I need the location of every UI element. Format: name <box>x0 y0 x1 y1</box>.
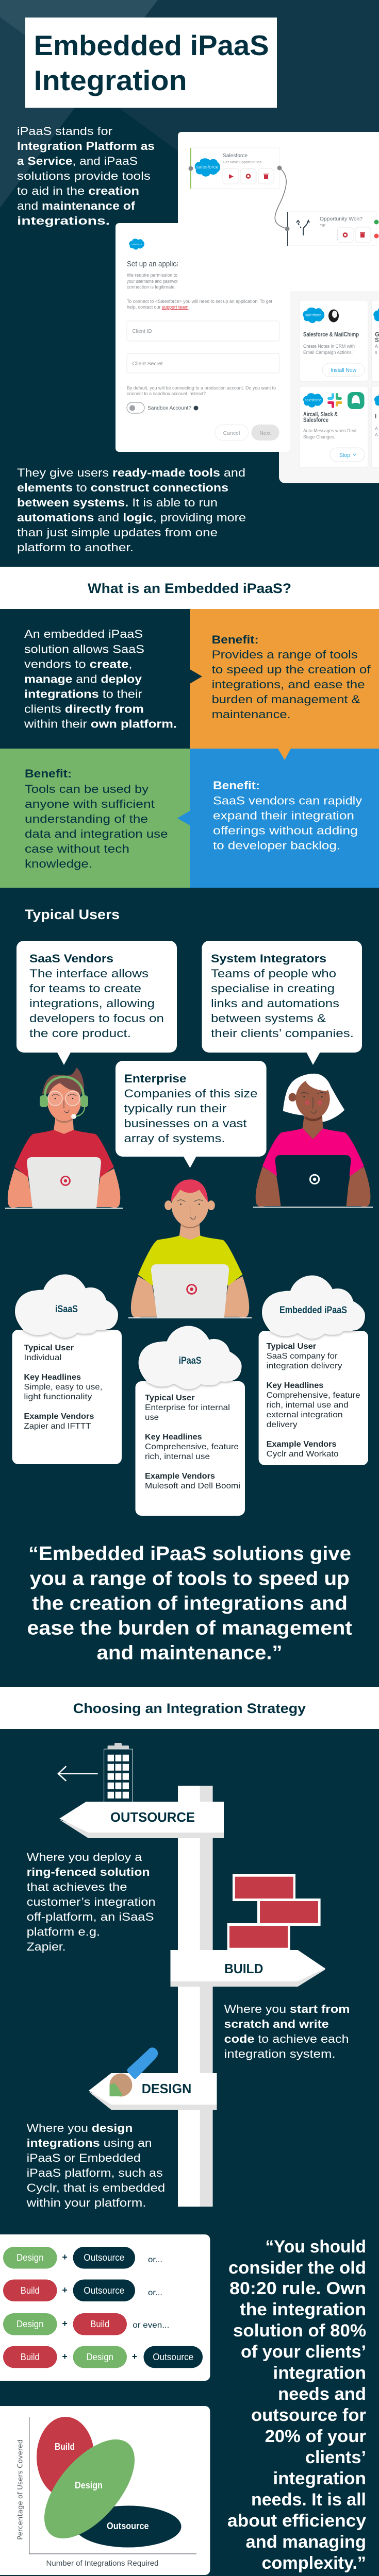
grid panel: definition: vendors to create , <box>24 657 132 671</box>
pull quote: 80:20 rule <box>227 2237 366 2573</box>
speech bubble: System Integrators: links and automations <box>211 997 339 1010</box>
workflow node: Opportunity Won: T/F <box>320 223 326 228</box>
pull quote: 80:20 rule: outsource for <box>251 2405 366 2425</box>
build description: integration system. <box>224 2047 336 2060</box>
template cards cropped at page edge <box>371 300 379 467</box>
speech bubble: Enterprise: typically run their <box>124 1102 227 1115</box>
intro text block <box>17 125 155 227</box>
combination row: design plus outsource: or... <box>148 2256 162 2264</box>
illustration: person with yellow shirt at laptop <box>128 1179 252 1318</box>
template card: Aircall, Slack and Salesforce: Stage Changes. <box>303 434 335 439</box>
comparison card: Embedded iPaaS: Cyclr and Workato <box>267 1450 339 1459</box>
combination row: design plus build: Build <box>90 2319 109 2329</box>
speech bubble: Enterprise <box>116 1061 267 1168</box>
heading: Choosing an Integration Strategy: Choosing an Integration Strategy <box>73 1701 306 1716</box>
speech bubble: System Integrators: between systems & <box>211 1012 326 1025</box>
pull quote: 80:20 rule: clients’ <box>305 2448 366 2467</box>
design description: iPaaS platform, such as <box>27 2166 163 2179</box>
template card: Salesforce and MailChimp: Email Campaign Actions. <box>303 350 353 355</box>
cloud: iSaaS: iSaaS <box>55 1304 78 1315</box>
speech bubble: SaaS Vendors: the core product. <box>29 1027 131 1040</box>
form buttons <box>215 425 279 440</box>
chart axes <box>29 2417 196 2554</box>
combination row: build plus design plus outsource <box>3 2346 203 2368</box>
grid panel: blue benefit <box>190 749 379 888</box>
grid panel: definition: integrations to their <box>24 687 142 701</box>
build description: scratch and write <box>224 2018 329 2030</box>
pull quote: 80:20 rule: 80:20 rule. Own <box>229 2279 366 2298</box>
template cards cropped at page edge: S <box>375 337 379 344</box>
arrow: definition to orange <box>190 669 202 684</box>
speech bubble: System Integrators: System Integrators <box>211 952 326 965</box>
combination row: design plus build: + <box>62 2318 68 2329</box>
speech bubble: SaaS Vendors: The interface allows <box>29 967 149 980</box>
grid panel: blue benefit: offerings without adding <box>213 824 358 837</box>
chart: strategy by coverage and integrations <box>0 2406 210 2575</box>
speech bubble: SaaS Vendors: integrations, allowing <box>29 997 155 1010</box>
grid panel: blue benefit: SaaS vendors can rapidly <box>213 794 362 807</box>
outsource description: Where you deploy a <box>27 1851 142 1863</box>
pull quote: 80:20 rule: about efficiency <box>227 2511 366 2531</box>
outsource description: Zapier. <box>27 1940 66 1953</box>
grid panel: blue benefit: to developer backlog. <box>213 839 340 852</box>
combination row: design plus outsource <box>3 2247 162 2269</box>
form buttons: Next <box>259 430 271 436</box>
outsource description <box>27 1851 156 1953</box>
comparison card: Embedded iPaaS: Typical User <box>267 1342 316 1351</box>
template cards cropped at page edge: A <box>375 426 378 431</box>
hero background facets <box>0 0 379 208</box>
design description: iPaaS or Embedded <box>27 2151 141 2164</box>
workflow node: Salesforce <box>189 148 282 189</box>
design description: integrations using an <box>27 2137 152 2149</box>
design description: within your platform. <box>26 2196 146 2209</box>
outsource description: that achieves the <box>27 1880 127 1893</box>
panel: set up an application form screenshot: connection is legitimate. <box>127 284 176 290</box>
combination row: build plus design plus outsource: Design <box>87 2352 113 2362</box>
speech bubble: System Integrators: Teams of people who <box>211 967 336 980</box>
title <box>25 18 277 108</box>
speech bubble: Enterprise: Companies of this size <box>124 1087 258 1100</box>
panel: set up an application form screenshot: Set up an application <box>127 260 191 268</box>
comparison card: Embedded iPaaS: Example Vendors <box>267 1440 337 1449</box>
ellipse: Outsource <box>75 2506 182 2547</box>
ellipse: Build: Build <box>55 2442 75 2452</box>
sign: OUTSOURCE <box>59 1802 224 1838</box>
comparison card: iPaaS: Comprehensive, feature <box>145 1443 239 1451</box>
workflow node: Salesforce: Get New Opportunities <box>223 160 261 164</box>
template cards cropped at page edge: A <box>375 344 378 349</box>
grid panel: orange benefit: maintenance. <box>212 708 291 721</box>
panel: set up an application form screenshot: salesforce <box>131 243 142 246</box>
second intro text block: than just simple updates from one <box>17 526 218 539</box>
cloud: Embedded iPaaS <box>262 1276 365 1338</box>
combination row: design plus outsource: Outsource <box>84 2252 124 2263</box>
comparison card: Embedded iPaaS <box>259 1276 368 1465</box>
pull quote: tools: the creation of integrations and <box>32 1593 348 1615</box>
panel: hero introduction <box>0 0 379 554</box>
grid panel: orange benefit <box>190 609 379 749</box>
panel: strategy combinations <box>0 2234 210 2381</box>
illustration: person with headset at laptop <box>5 1067 123 1208</box>
grid panel: definition: clients directly from <box>24 703 144 715</box>
cloud: iPaaS: iPaaS <box>178 1355 201 1366</box>
speech bubble: System Integrators: specialise in creating <box>211 982 335 995</box>
panel: set up an application form screenshot: your username and password <box>127 279 180 284</box>
pull quote: tools <box>27 1543 352 1664</box>
sandbox toggle: Sandbox Account? <box>147 405 191 411</box>
build description: code to achieve each <box>224 2032 349 2045</box>
speech bubble: System Integrators <box>202 941 362 1065</box>
panel: benefits grid <box>0 609 379 888</box>
icon: paintbrush <box>109 2047 158 2097</box>
speech bubble: SaaS Vendors: for teams to create <box>29 982 141 995</box>
comparison card: iPaaS <box>135 1326 245 1516</box>
arrow: orange to blue <box>278 749 291 760</box>
comparison card: Embedded iPaaS: Key Headlines <box>267 1381 323 1390</box>
sandbox toggle <box>127 402 198 413</box>
speech bubble: System Integrators: their clients’ companies. <box>211 1027 354 1040</box>
comparison card: iSaaS: Zapier and IFTTT <box>24 1422 91 1431</box>
panel: workflow builder screenshot <box>178 132 379 291</box>
outsource description: platform e.g. <box>27 1925 100 1938</box>
heading: Choosing an Integration Strategy <box>0 1687 379 1729</box>
pull quote: 80:20 rule: “You should <box>265 2237 366 2257</box>
pull quote: tools: “Embedded iPaaS solutions give <box>28 1543 351 1565</box>
sign: DESIGN <box>89 2047 217 2110</box>
second intro text block: automations and logic , providing more <box>17 511 246 524</box>
comparison card: iPaaS: Enterprise for internal <box>145 1403 230 1412</box>
pull quote: 80:20 rule: and managing <box>245 2532 366 2552</box>
comparison card: Embedded iPaaS: SaaS company for <box>267 1352 338 1361</box>
sign: BUILD: BUILD <box>224 1961 263 1976</box>
panel: integration templates screenshot <box>279 258 379 483</box>
grid panel: blue benefit: Benefit: <box>213 779 260 792</box>
combination row: build plus design plus outsource: + <box>62 2351 68 2362</box>
panel: set up an application form screenshot: By default, you will be connecting to a production account. Do you want to <box>127 385 276 391</box>
pull quote: tools: you a range of tools to speed up <box>30 1568 350 1590</box>
comparison card: iPaaS: Key Headlines <box>145 1433 202 1442</box>
speech bubble: SaaS Vendors <box>17 941 177 1065</box>
grid panel: definition: solution allows SaaS <box>24 643 144 655</box>
title: Embedded iPaaS <box>34 29 269 61</box>
comparison card: iSaaS: Simple, easy to use, <box>24 1383 102 1392</box>
speech bubble: Enterprise: Enterprise <box>124 1072 187 1085</box>
form field: client id <box>127 321 279 341</box>
grid panel: definition <box>0 609 190 749</box>
template card: Salesforce and MailChimp: Salesforce & MailChimp <box>303 332 359 338</box>
comparison card: Embedded iPaaS: Comprehensive, feature <box>267 1391 360 1400</box>
build description: Where you start from <box>224 2003 350 2015</box>
grid panel: orange benefit: Benefit: <box>212 633 259 646</box>
form buttons: Cancel <box>223 430 240 436</box>
form field: client id: Client ID <box>132 329 152 334</box>
design description: Cyclr, that is embedded <box>27 2181 165 2194</box>
pull quote: tools: ease the burden of management <box>27 1618 352 1639</box>
template card: Salesforce and MailChimp: Install Now <box>331 367 356 374</box>
combination row: design plus outsource: Design <box>17 2252 43 2263</box>
grid panel: green benefit: Tools can be used by <box>25 783 149 795</box>
signpost pole <box>178 1786 213 2207</box>
intro text block: a Service , and iPaaS <box>17 155 138 167</box>
grid panel: green benefit: knowledge. <box>25 857 92 870</box>
sign: BUILD <box>170 1950 325 1987</box>
x axis label: Number of Integrations Required <box>46 2559 159 2568</box>
intro text block: iPaaS stands for <box>17 125 112 138</box>
ellipse: Outsource: Outsource <box>107 2521 149 2531</box>
comparison card: iSaaS: Key Headlines <box>24 1373 81 1382</box>
comparison card: Embedded iPaaS: delivery <box>267 1420 298 1429</box>
grid panel: definition: manage and deploy <box>24 673 142 685</box>
grid panel: definition: An embedded iPaaS <box>24 628 143 640</box>
pull quote: 80:20 rule: integration <box>273 2469 366 2488</box>
template card: Salesforce and MailChimp <box>300 300 368 381</box>
outsource description: off-platform, an iSaaS <box>27 1910 154 1923</box>
intro text block: to aid in the creation <box>17 184 139 197</box>
grid panel: orange benefit: integrations, and ease the <box>212 678 365 691</box>
workflow node: Salesforce: salesforce <box>196 164 219 170</box>
intro text block: integrations. <box>17 214 110 227</box>
form field: client secret: Client Secret <box>132 361 163 367</box>
grid panel: green benefit <box>0 749 190 888</box>
combination row: build plus outsource: or... <box>148 2289 162 2297</box>
comparison card: iPaaS: use <box>145 1413 159 1422</box>
intro text block: Integration Platform as <box>17 140 155 152</box>
template card: Aircall, Slack and Salesforce: Salesforce <box>303 417 328 423</box>
grid panel: blue benefit: expand their integration <box>213 809 354 822</box>
panel: set up an application form screenshot: To connect to <Salesforce> you will need to set up an application. To get <box>127 299 272 304</box>
comparison card: iSaaS: Individual <box>24 1353 61 1362</box>
comparison card: iPaaS: Example Vendors <box>145 1472 215 1481</box>
second intro text block <box>17 466 246 554</box>
comparison card: iSaaS: light functionality <box>24 1393 92 1401</box>
pull quote: 80:20 rule: solution of 80% <box>233 2321 366 2341</box>
comparison card: Embedded iPaaS: rich, internal use and <box>267 1401 349 1410</box>
outsource description: ring-fenced solution <box>27 1866 150 1878</box>
template cards cropped at page edge: A <box>375 432 378 437</box>
grid panel: green benefit: case without tech <box>25 842 129 855</box>
comparison card: iPaaS: Mulesoft and Dell Boomi <box>145 1482 240 1490</box>
outsource description: customer’s integration <box>27 1895 156 1908</box>
grid panel: green benefit: Benefit: <box>25 767 72 780</box>
y axis label: Percentage of Users Covered <box>17 2439 25 2540</box>
template card: Aircall, Slack and Salesforce <box>300 386 368 467</box>
pull quote: 80:20 rule: 20% of your <box>265 2427 366 2446</box>
grid panel: definition: within their own platform. <box>24 717 177 731</box>
pull quote: 80:20 rule: integration <box>273 2363 366 2383</box>
combination row: build plus outsource <box>3 2279 162 2301</box>
sign: OUTSOURCE: OUTSOURCE <box>110 1809 195 1825</box>
second intro text block: They give users ready-made tools and <box>17 466 245 479</box>
combination row: build plus design plus outsource: Build <box>21 2352 40 2362</box>
pull quote: 80:20 rule: of your clients’ <box>241 2342 366 2362</box>
title: Integration <box>34 64 187 96</box>
build description <box>224 2003 350 2060</box>
comparison card: iSaaS: Typical User <box>24 1344 74 1352</box>
template card: Aircall, Slack and Salesforce: Auto Messages when Deal <box>303 428 356 433</box>
comparison card: iPaaS: rich, internal use <box>145 1452 210 1461</box>
speech bubble: SaaS Vendors: SaaS Vendors <box>29 952 113 965</box>
pull quote: 80:20 rule: complexity.” <box>262 2553 366 2573</box>
grid panel: green benefit: data and integration use <box>25 827 168 840</box>
heading: What is an Embedded iPaaS <box>0 567 379 609</box>
pull quote: 80:20 rule: the integration <box>240 2300 366 2319</box>
icon: office building with arrow <box>58 1743 133 1803</box>
grid panel: green benefit: anyone with sufficient <box>25 798 155 810</box>
second intro text block: between systems. It is able to run <box>17 496 218 509</box>
second intro text block: elements to construct connections <box>17 481 228 494</box>
pull quote: 80:20 rule: consider the old <box>228 2258 366 2278</box>
form field: client secret <box>127 353 279 373</box>
comparison card: iSaaS <box>12 1275 122 1464</box>
ellipse: Design: Design <box>75 2480 103 2490</box>
combination row: design plus build: Design <box>17 2319 43 2329</box>
combination row: design plus outsource: + <box>62 2252 68 2262</box>
combination row: build plus design plus outsource: Outsource <box>153 2352 193 2362</box>
pull quote: 80:20 rule: needs and <box>278 2384 366 2404</box>
workflow connector <box>275 168 287 229</box>
workflow node: Opportunity Won: Opportunity Won? <box>320 216 362 222</box>
panel: set up an application form screenshot <box>116 223 290 452</box>
design description: Where you design <box>27 2122 133 2134</box>
workflow node: Salesforce: Salesforce <box>223 152 248 159</box>
combination row: build plus design plus outsource: + <box>132 2351 137 2362</box>
grid panel: orange benefit: burden of management & <box>212 693 360 706</box>
template card: Aircall, Slack and Salesforce: Stop <box>339 452 350 459</box>
design description <box>26 2122 165 2209</box>
panel: set up an application form screenshot: We require permission to <box>127 273 177 278</box>
grid panel: orange benefit: to speed up the creation of <box>212 663 371 676</box>
sign: DESIGN: DESIGN <box>142 2081 191 2096</box>
cloud: iSaaS <box>15 1275 118 1337</box>
comparison card: iPaaS: Typical User <box>145 1394 195 1402</box>
cloud: Embedded iPaaS: Embedded iPaaS <box>279 1305 347 1316</box>
intro text block: and maintenance of <box>17 199 136 212</box>
template card: Aircall, Slack and Salesforce: Aircall, Slack & <box>303 412 338 418</box>
workflow node: Opportunity Won <box>285 212 378 246</box>
combination row: build plus outsource: Outsource <box>84 2285 124 2296</box>
comparison card: Embedded iPaaS: integration delivery <box>267 1362 342 1370</box>
intro text block: solutions provide tools <box>17 170 151 182</box>
panel: set up an application form screenshot: connect to a sandbox account instead? <box>127 391 206 396</box>
combination row: build plus outsource: + <box>62 2285 68 2295</box>
speech bubble: Enterprise: array of systems. <box>124 1132 225 1145</box>
template cards cropped at page edge: I <box>375 414 376 420</box>
ellipse: Design <box>28 2424 151 2554</box>
heading: What is an Embedded iPaaS: What is an Embedded iPaaS? <box>88 581 291 596</box>
comparison card: iSaaS: Example Vendors <box>24 1412 94 1421</box>
arrow: blue to green <box>177 811 190 825</box>
combination row: design plus build <box>3 2313 169 2335</box>
ellipse: Build <box>37 2417 94 2497</box>
grid panel: orange benefit: Provides a range of tools <box>212 648 358 661</box>
comparison card: Embedded iPaaS: external integration <box>267 1411 343 1419</box>
icon: stacked bricks <box>227 1874 321 1951</box>
template card: Salesforce and MailChimp: Create Notes in CRM with <box>303 344 355 349</box>
second intro text block: platform to another. <box>17 541 134 554</box>
combination row: build plus outsource: Build <box>21 2285 40 2296</box>
heading: Typical Users: Typical Users <box>25 907 120 922</box>
cloud: iPaaS <box>139 1326 242 1389</box>
illustration: person with white hair at laptop <box>253 1074 373 1207</box>
pull quote: tools: and maintenance.” <box>97 1642 283 1664</box>
combination row: design plus build: or even... <box>133 2321 169 2330</box>
template cards cropped at page edge: s <box>375 350 377 355</box>
panel: set up an application form screenshot: help, contact our support team. <box>127 304 190 310</box>
speech bubble: Enterprise: businesses on a vast <box>124 1117 246 1130</box>
template card: Salesforce and MailChimp: salesforce <box>305 314 322 317</box>
pull quote: 80:20 rule: needs. It is all <box>251 2490 366 2510</box>
grid panel: green benefit: understanding of the <box>25 812 148 825</box>
speech bubble: SaaS Vendors: developers to focus on <box>29 1012 164 1025</box>
template card: Aircall, Slack and Salesforce: salesforce <box>305 399 321 402</box>
